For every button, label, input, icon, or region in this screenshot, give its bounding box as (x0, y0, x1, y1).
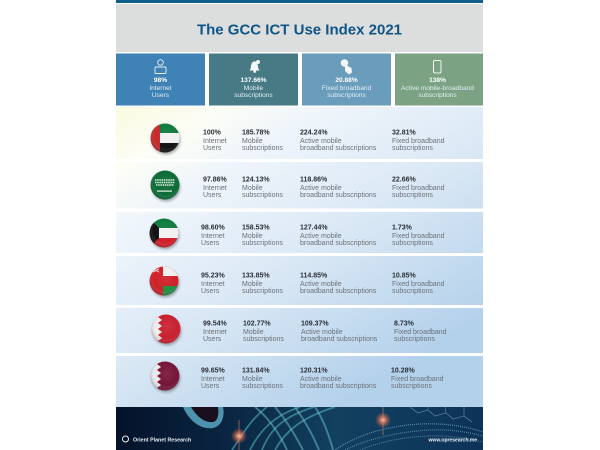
row: Qatar: 120.31% (300, 368, 328, 374)
row: Qatar: broadband subscriptions (300, 383, 377, 390)
row: Saudi Arabia: 97.86% (203, 176, 228, 184)
row: Qatar: Active mobile (300, 376, 342, 383)
row: Kuwait: 1.73% (392, 224, 413, 232)
row: Bahrain: 102.77% (243, 320, 271, 328)
row: Qatar: Users (201, 383, 220, 390)
footer website: www.opresearch.me (428, 438, 477, 444)
row: United Arab Emirates: Users (203, 145, 222, 152)
icon: Oman flag (149, 266, 180, 298)
row: Bahrain: Users (203, 336, 222, 343)
row: United Arab Emirates: 185.78% (242, 130, 270, 136)
summary tile: internet users (116, 54, 205, 106)
row: Kuwait: 158.53% (242, 224, 270, 232)
row: Oman: Mobile (242, 281, 263, 288)
row: Bahrain: Active mobile (301, 329, 343, 336)
icon: bell (250, 60, 260, 73)
row: Qatar: 10.28% (391, 368, 416, 374)
row: Saudi Arabia: broadband subscriptions (300, 192, 377, 199)
row: United Arab Emirates (116, 107, 483, 159)
footer logo: Orient Planet Research (133, 438, 191, 444)
icon: Bahrain flag (151, 314, 182, 346)
row: Kuwait: subscriptions (242, 240, 283, 247)
row: Qatar: subscriptions (391, 383, 432, 390)
row: United Arab Emirates: broadband subscriptions (300, 145, 377, 152)
row: Kuwait: Active mobile (300, 233, 342, 240)
row: Kuwait: 98.60% (201, 224, 226, 232)
row: Kuwait: broadband subscriptions (300, 240, 377, 247)
row: United Arab Emirates: subscriptions (242, 145, 283, 152)
row: Saudi Arabia: Users (203, 192, 222, 199)
icon: smartphone (434, 60, 441, 73)
row: Bahrain: subscriptions (243, 336, 284, 343)
footer banner (116, 407, 483, 450)
row: United Arab Emirates: 32.81% (392, 130, 417, 136)
summary tile: active mobile-broadband: Active mobile-broadband (401, 85, 474, 92)
summary tile: active mobile-broadband: 138% (429, 77, 446, 84)
row: Qatar: Fixed broadband (391, 376, 444, 383)
summary tile: fixed broadband: Fixed broadband (322, 85, 372, 92)
row: Saudi Arabia: subscriptions (392, 192, 433, 199)
icon: touch hand (341, 59, 352, 74)
icon: user with laptop (155, 60, 166, 74)
footer technology artwork (183, 407, 483, 450)
row: Bahrain: Mobile (243, 329, 264, 336)
row: Kuwait: subscriptions (392, 240, 433, 247)
row: Bahrain (116, 308, 483, 353)
row: Saudi Arabia: subscriptions (242, 192, 283, 199)
row: Bahrain: broadband subscriptions (301, 336, 378, 343)
title: The GCC ICT Use Index 2021 (197, 22, 402, 38)
row: Oman: 133.85% (242, 272, 270, 280)
summary tile: mobile subscriptions: Mobile (244, 85, 264, 92)
row: Oman: 10.85% (392, 272, 417, 280)
row: Kuwait: Users (201, 240, 220, 247)
row: Oman: 95.23% (201, 272, 226, 280)
summary tile: fixed broadband (302, 54, 391, 106)
summary tile: mobile subscriptions: subscriptions (234, 92, 273, 99)
row: United Arab Emirates: Mobile (242, 138, 263, 145)
row: Saudi Arabia: 22.66% (392, 176, 417, 184)
top accent bar (116, 0, 483, 3)
row: Qatar: Internet (201, 376, 225, 383)
row: United Arab Emirates: Internet (203, 138, 227, 145)
row: Kuwait: Mobile (242, 233, 263, 240)
row: Oman (116, 256, 483, 305)
row: Qatar: Mobile (242, 376, 263, 383)
icon: Saudi flag (150, 170, 180, 202)
row: Bahrain: Fixed broadband (394, 329, 447, 336)
row: Saudi Arabia: 118.86% (300, 176, 328, 184)
row: United Arab Emirates: 100% (203, 130, 222, 136)
row: Qatar (116, 356, 483, 407)
icon: UAE flag (150, 123, 180, 154)
row: United Arab Emirates: subscriptions (392, 145, 433, 152)
row: Oman: broadband subscriptions (300, 288, 377, 295)
row: Bahrain: 8.73% (394, 320, 415, 328)
row: Saudi Arabia: 124.13% (242, 176, 270, 184)
row: Saudi Arabia: Mobile (242, 185, 263, 192)
row: Qatar: 99.65% (201, 368, 226, 374)
summary tile: internet users: Users (152, 92, 170, 99)
row: Oman: Internet (201, 281, 225, 288)
summary tile: active mobile-broadband (395, 54, 483, 106)
summary tile: fixed broadband: 20.88% (335, 77, 358, 84)
summary tile: active mobile-broadband: subscriptions (418, 92, 457, 99)
row: Qatar: 131.84% (242, 368, 270, 374)
row: Saudi Arabia: Active mobile (300, 185, 342, 192)
row: Bahrain: 109.37% (301, 320, 329, 328)
row: Qatar: subscriptions (242, 383, 283, 390)
row: Saudi Arabia (116, 162, 483, 208)
row: Bahrain: 99.54% (203, 320, 228, 328)
row: Kuwait: 127.44% (300, 224, 328, 232)
summary tile: fixed broadband: subscriptions (327, 92, 366, 99)
row: Bahrain: Internet (203, 329, 227, 336)
row: Kuwait: Internet (201, 233, 225, 240)
footer logo (122, 436, 191, 444)
row: United Arab Emirates: Active mobile (300, 138, 342, 145)
summary tile: mobile subscriptions: 137.66% (240, 77, 267, 84)
row: Oman: subscriptions (242, 288, 283, 295)
title banner (116, 4, 483, 52)
row: Oman: Fixed broadband (392, 281, 445, 288)
row: Oman: 114.85% (300, 272, 328, 280)
row: Bahrain: subscriptions (394, 336, 435, 343)
row: Oman: Active mobile (300, 281, 342, 288)
row: United Arab Emirates: Fixed broadband (392, 138, 445, 145)
summary tile: mobile subscriptions (209, 54, 298, 106)
row: Saudi Arabia: Internet (203, 185, 227, 192)
summary tile: internet users: Internet (149, 85, 172, 92)
row: United Arab Emirates: 224.24% (300, 130, 328, 136)
icon: Qatar flag (150, 361, 180, 392)
row: Oman: subscriptions (392, 288, 433, 295)
row: Oman: Users (201, 288, 220, 295)
row: Saudi Arabia: Fixed broadband (392, 185, 445, 192)
summary tile: internet users: 98% (154, 77, 167, 84)
row: Kuwait (116, 212, 483, 253)
icon: Kuwait flag (149, 218, 180, 250)
row: Kuwait: Fixed broadband (392, 233, 445, 240)
